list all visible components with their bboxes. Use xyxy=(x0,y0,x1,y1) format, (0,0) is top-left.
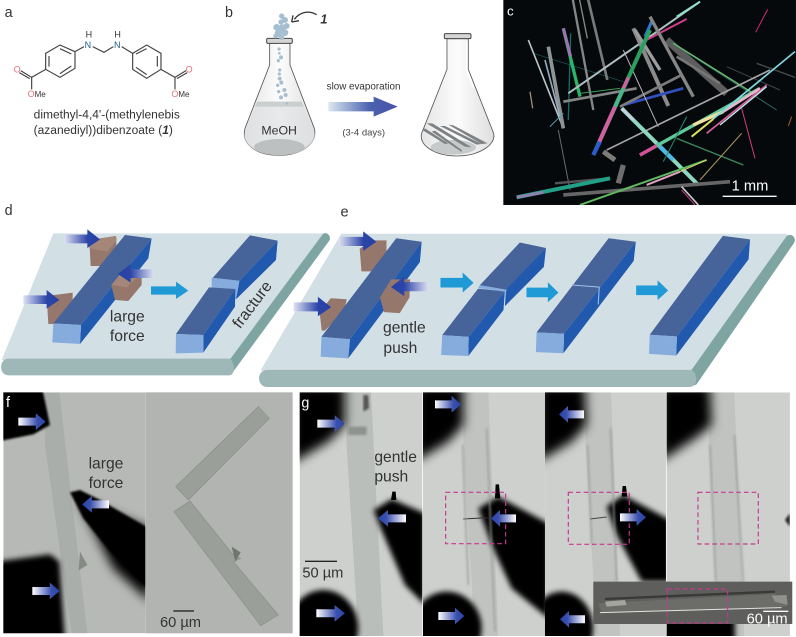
crystal needles xyxy=(517,0,795,205)
atom labels: O xyxy=(28,89,35,99)
panel b: crystallisation flasks xyxy=(225,5,494,156)
healed crystal xyxy=(649,236,750,356)
intact crystal xyxy=(52,235,152,344)
curved arrow and compound number: 1 xyxy=(320,13,327,27)
glass slide xyxy=(1,233,330,375)
panel c: polarised micrograph of crystals xyxy=(503,0,796,205)
compound name: (azanediyl))dibenzoate (1) xyxy=(34,123,173,137)
process arrow 2 xyxy=(526,282,558,302)
process arrow xyxy=(151,282,188,299)
frame 2: cracked crystal xyxy=(423,392,545,636)
panel d: large force fracture schematic xyxy=(1,203,330,375)
panel e: gentle push healing schematic xyxy=(259,204,795,387)
panel label f: f xyxy=(6,395,10,411)
rear brown holders xyxy=(320,240,386,331)
powder falling into flask xyxy=(273,13,290,105)
panel label c: c xyxy=(507,3,514,18)
panel label d: d xyxy=(5,203,13,219)
atom labels: N xyxy=(85,40,91,50)
frame 4: healed crystal xyxy=(660,385,790,637)
atom labels: H xyxy=(114,30,121,40)
scale bar 1 mm xyxy=(723,178,777,197)
frame: fractured crystal xyxy=(145,392,293,633)
large force label: large xyxy=(89,456,124,473)
frame 1: gentle push xyxy=(300,392,422,636)
panel label g: g xyxy=(301,396,309,412)
gentle push label: gentle xyxy=(383,320,426,337)
panel label a: a xyxy=(5,5,13,21)
atom labels: Me xyxy=(35,90,46,99)
push arrows xyxy=(23,229,154,309)
atom labels: H xyxy=(86,30,92,40)
solvent label: MeOH xyxy=(261,123,297,137)
large force label: large xyxy=(110,309,145,326)
panel f: micrographs of fracture xyxy=(0,385,293,637)
rear brown holders xyxy=(47,236,117,324)
gentle push label second line: push xyxy=(383,340,417,357)
scale bar 60 µm: 60 µm xyxy=(160,615,201,631)
inset scale bar 60 µm: 60 µm xyxy=(747,612,788,628)
atom labels: N xyxy=(114,40,120,50)
flask with methanol xyxy=(244,38,315,155)
evaporation arrow xyxy=(328,97,398,117)
healing crystal step xyxy=(536,238,636,353)
duration label: (3-4 days) xyxy=(342,128,385,139)
panel label e: e xyxy=(341,204,349,220)
crystal under gentle push xyxy=(321,238,422,358)
atom labels xyxy=(14,30,193,99)
fractured crystal xyxy=(176,235,278,353)
atom labels: O xyxy=(186,64,193,74)
atom labels: O xyxy=(14,64,21,74)
panel label b: b xyxy=(225,5,233,21)
structural formula bonds xyxy=(19,45,187,89)
frame: crystal being pressed xyxy=(0,385,150,637)
atom labels: Me xyxy=(178,90,190,99)
glass slide xyxy=(259,234,795,387)
front brown holder xyxy=(111,268,142,301)
gentle push label second line: push xyxy=(374,468,408,485)
gentle push label: gentle xyxy=(374,449,417,466)
scale bar 1 mm: 1 mm xyxy=(732,178,768,194)
large force label second line: force xyxy=(110,328,145,345)
atom labels: O xyxy=(171,89,178,99)
panel g: micrographs of healing sequence xyxy=(288,385,792,637)
SEM inset xyxy=(593,582,792,624)
process arrow 1 xyxy=(440,273,474,292)
slow evaporation label: slow evaporation xyxy=(327,82,400,93)
front brown holder xyxy=(380,279,410,313)
frame 3: crack closing xyxy=(544,392,666,636)
push arrows xyxy=(294,231,429,316)
large force label second line: force xyxy=(89,475,124,492)
curved arrow and compound number xyxy=(292,12,327,27)
process arrow 3 xyxy=(636,280,668,300)
push arrows xyxy=(316,396,646,628)
compound name: dimethyl-4,4'-(methylenebis xyxy=(34,108,180,122)
dashed highlight boxes xyxy=(446,492,758,623)
force arrows xyxy=(18,413,109,599)
bent crystal step xyxy=(441,242,546,356)
compound name xyxy=(34,108,180,137)
flask with crystals xyxy=(421,34,494,156)
fracture label: fracture xyxy=(230,278,276,332)
panel a: molecular structure xyxy=(5,5,193,137)
scale bar 50 µm: 50 µm xyxy=(302,566,343,582)
